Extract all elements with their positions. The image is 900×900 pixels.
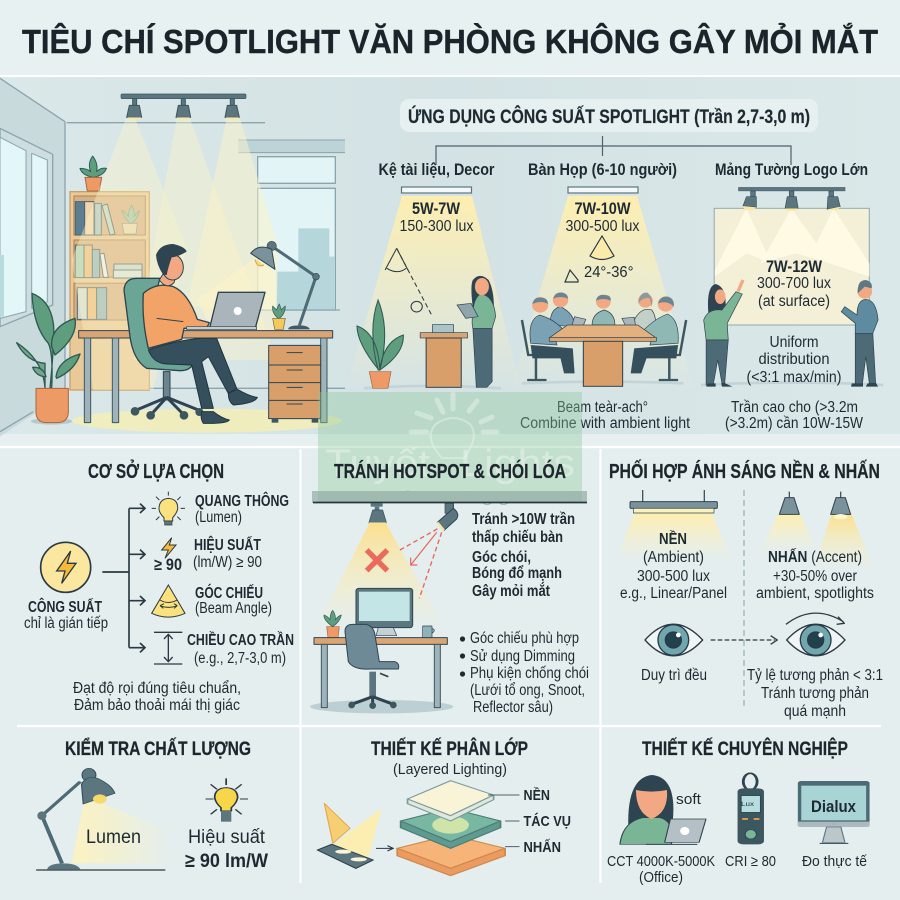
label: power: CÔNG SUẤT xyxy=(28,597,102,616)
icons: lamp and bulb xyxy=(36,768,248,870)
column: logo wall: (<3:1 max/min) xyxy=(746,369,842,386)
warning text: Góc chói, xyxy=(472,549,531,566)
label: ceiling height: CHIỀU CAO TRẦN xyxy=(187,630,294,649)
conclusion text: Đảm bảo thoải mái thị giác xyxy=(74,697,240,714)
illustration: desk under spotlight xyxy=(310,503,458,713)
warning text: Bóng đổ mạnh xyxy=(472,564,562,582)
diagram icons xyxy=(41,492,185,664)
ambient text xyxy=(620,529,727,602)
heading xyxy=(371,736,528,778)
watermark xyxy=(312,392,587,505)
conclusion text xyxy=(73,680,241,714)
panel: avoid hotspot and glare xyxy=(310,503,589,716)
conclusion text: Đạt độ rọi đúng tiêu chuẩn, xyxy=(73,680,241,697)
column: shelf and decor: 150-300 lux xyxy=(400,218,474,235)
ambient text: e.g., Linear/Panel xyxy=(620,585,727,602)
solutions list: Sử dụng Dimming xyxy=(470,648,575,665)
heading: avoid hotspot and glare: TRÁNH HOTSPOT & CHÓI LÓA xyxy=(334,459,566,483)
label: ceiling height xyxy=(187,630,294,667)
watermark: Lights xyxy=(460,443,575,485)
warning text: Gây mỏi mắt xyxy=(472,581,551,600)
ambient text: NỀN xyxy=(659,529,687,548)
column: meeting table: Bàn Họp (6-10 người) xyxy=(528,160,677,179)
column: logo wall: Uniform xyxy=(770,334,818,351)
eye label: uniform: Duy trì đều xyxy=(641,667,707,684)
layer labels: TÁC VỤ xyxy=(524,813,571,830)
person xyxy=(148,338,237,408)
watermark: Tuyết xyxy=(325,443,430,485)
label: field measurement: Đo thực tế xyxy=(802,853,868,870)
accent text xyxy=(756,549,874,602)
heading: THIẾT KẾ PHÂN LỚP xyxy=(371,736,528,760)
heading pill: power application xyxy=(400,99,818,132)
desk xyxy=(79,331,333,338)
ambient text: 300-500 lux xyxy=(637,568,710,585)
warning text xyxy=(472,511,575,600)
label: ceiling height: (e.g., 2,7-3,0 m) xyxy=(194,650,286,667)
panel: professional design: Lux xyxy=(741,801,755,808)
column: shelf and decor xyxy=(345,160,522,392)
column: logo wall: 300-700 lux xyxy=(757,275,831,292)
label: efficacy: HIỆU SUẤT xyxy=(194,535,261,554)
watermark: Đèn chuẩn - Không gian chất xyxy=(324,489,582,505)
note: high ceiling: (>3.2m) cần 10W-15W xyxy=(725,415,863,432)
column: logo wall xyxy=(701,160,883,387)
eye label: contrast xyxy=(747,667,883,720)
column: meeting table: 7W-10W xyxy=(574,200,631,218)
label: Dialux: Dialux xyxy=(811,797,856,816)
panel: selection basis xyxy=(24,459,294,714)
icons: lights and eyes xyxy=(615,490,873,656)
solutions list: Phụ kiện chống chói xyxy=(470,665,589,682)
eye label: contrast: Tránh tương phản xyxy=(761,685,869,702)
icons: designer, meter and monitor xyxy=(620,773,870,844)
label: power: chỉ là gián tiếp xyxy=(24,615,108,632)
solutions list: Reflector sâu) xyxy=(473,699,553,716)
label: colour temperature: (Office) xyxy=(639,869,683,886)
column: meeting table xyxy=(510,160,695,392)
label: efficacy xyxy=(193,535,262,571)
heading: CƠ SỞ LỰA CHỌN xyxy=(88,459,224,483)
panel: layered design xyxy=(317,736,571,876)
label: efficacy: ≥ 90 lm/W xyxy=(185,850,269,872)
label: soft: soft xyxy=(676,791,702,808)
illustration: office room xyxy=(0,78,345,437)
label: efficacy: (lm/W) ≥ 90 xyxy=(193,554,262,571)
label: luminous flux: (Lumen) xyxy=(195,509,242,526)
layer labels: NỀN xyxy=(524,787,550,804)
desk plant and pot xyxy=(273,318,285,329)
drawers xyxy=(269,345,321,419)
desk lamp xyxy=(288,325,310,329)
column: logo wall: distribution xyxy=(758,351,830,368)
column: logo wall: (at surface) xyxy=(758,293,830,310)
column: shelf and decor: 5W-7W xyxy=(412,200,460,218)
layer labels: NHẤN xyxy=(524,839,561,856)
note: meeting table beam xyxy=(520,399,691,432)
eye label: contrast: quá mạnh xyxy=(784,703,846,720)
panel: quality check xyxy=(36,737,269,872)
chair xyxy=(163,372,170,400)
solutions list xyxy=(460,630,589,716)
warning text: thấp chiếu bàn xyxy=(472,529,563,546)
panel: selection basis: ≥ 90 xyxy=(154,556,182,574)
column: logo wall: Mảng Tường Logo Lớn xyxy=(715,160,868,179)
column: logo wall: 7W-12W xyxy=(766,258,822,276)
label: beam angle xyxy=(195,583,272,617)
label: lumen: Lumen xyxy=(86,827,141,848)
warning text: Tránh >10W trần xyxy=(472,511,575,528)
label: efficacy xyxy=(185,827,269,872)
accent text: ambient, spotlights xyxy=(756,585,874,602)
label: colour temperature: CCT 4000K-5000K xyxy=(607,853,715,870)
column: shelf and decor: Kệ tài liệu, Decor xyxy=(378,160,495,179)
heading pill: power application: ỨNG DỤNG CÔNG SUẤT SPOTLIGHT (Trần 2,7-3,0 m) xyxy=(408,104,810,128)
panel: ambient and accent xyxy=(609,459,883,720)
label: luminous flux: QUANG THÔNG xyxy=(195,491,289,510)
heading: THIẾT KẾ CHUYÊN NGHIỆP xyxy=(642,736,848,760)
accent text: NHẤN (Accent) xyxy=(768,549,862,566)
label: efficacy: Hiệu suất xyxy=(188,827,266,848)
label: power xyxy=(24,597,108,632)
label: colour rendering: CRI ≥ 80 xyxy=(725,853,776,870)
column: meeting table: 300-500 lux xyxy=(566,218,640,235)
label: beam angle: (Beam Angle) xyxy=(195,600,272,617)
layer labels xyxy=(524,787,571,856)
heading: (Layered Lighting) xyxy=(393,761,507,778)
plant left xyxy=(17,293,80,388)
solutions list: (Lưới tổ ong, Snoot, xyxy=(470,682,585,699)
panel: office hero scene xyxy=(0,77,900,446)
label: luminous flux xyxy=(195,491,289,526)
note: meeting table beam: Combine with ambient light xyxy=(520,415,691,432)
heading: KIỂM TRA CHẤT LƯỢNG xyxy=(65,737,251,760)
note: high ceiling: Trần cao cho (>3.2m xyxy=(731,399,858,416)
accent text: +30-50% over xyxy=(773,568,857,585)
note: meeting table beam: Beam teàr-ach° xyxy=(557,399,648,416)
label: beam angle: GÓC CHIẾU xyxy=(195,583,263,602)
diagram: stacked layers xyxy=(317,781,519,876)
note: high ceiling xyxy=(725,399,863,432)
label: colour temperature xyxy=(607,853,715,886)
panel: professional design xyxy=(607,736,870,886)
column: meeting table: 24°-36° xyxy=(584,264,634,281)
solutions list: Góc chiếu phù hợp xyxy=(470,630,579,647)
laptop xyxy=(209,292,265,329)
ambient text: (Ambient) xyxy=(643,549,704,566)
